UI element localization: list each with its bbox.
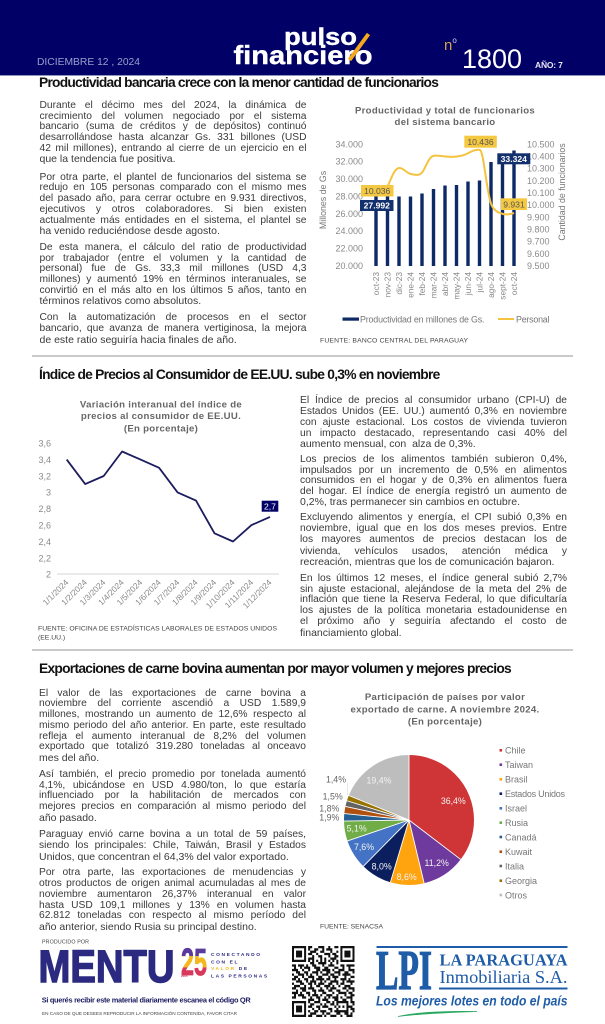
pie outer labels bbox=[319, 774, 346, 823]
source: FUENTE: BANCO CENTRAL DEL PARAGUAY bbox=[320, 338, 468, 344]
data labels: 33.324 bbox=[501, 154, 527, 164]
chart title: Productividad y total de funcionarios bbox=[355, 106, 535, 116]
heading: indice de precios: Índice de Precios al Consumidor de EE.UU. sube 0,3% en noviembre bbox=[39, 367, 440, 382]
legend: Otros bbox=[505, 890, 528, 900]
year: AÑO: 7 bbox=[535, 60, 563, 70]
text block: exportaciones bbox=[39, 688, 306, 933]
x axis month labels: sept-24 bbox=[498, 272, 508, 300]
left axis labels: 28.000 bbox=[335, 191, 363, 201]
logo: la paraguaya inmobiliaria: LPI bbox=[376, 940, 432, 1002]
chart title: Participación de países por valor bbox=[365, 692, 525, 703]
x axis month labels: mar-24 bbox=[428, 272, 438, 298]
legend: Rusia bbox=[505, 818, 528, 828]
paragraph 1: refleja el aumento interanual de 8,2% del volumen bbox=[39, 731, 306, 742]
legend bbox=[500, 746, 566, 900]
logo: la paraguaya inmobiliaria: Los mejores lotes en todo el país bbox=[376, 992, 568, 1008]
y axis labels: 2,8 bbox=[38, 504, 51, 514]
issue number symbol: no bbox=[444, 36, 457, 54]
heading: productividad: Productividad bancaria crece con la menor cantidad de funcionarios bbox=[39, 74, 438, 90]
x axis date labels: 1/10/2024 bbox=[204, 577, 237, 611]
logo: 25 years: 2005 bbox=[181, 974, 188, 978]
paragraph 3: los mayores aumentos de precios destacan los de bbox=[300, 534, 567, 545]
chart title: (En porcentaje) bbox=[124, 424, 198, 434]
axis titles: Millones de Gs bbox=[318, 170, 328, 229]
x axis month labels: oct-23 bbox=[371, 272, 381, 295]
right axis labels: 9.600 bbox=[527, 249, 550, 259]
axis titles bbox=[318, 143, 567, 241]
paragraph 3: términos relativos como absolutos. bbox=[40, 295, 201, 307]
chart: productividad y funcionarios bbox=[318, 106, 567, 344]
source: FUENTE: SENACSA bbox=[320, 924, 383, 930]
chart title bbox=[350, 692, 540, 727]
paragraph 3: noviembre, igual que en los dos meses previos. Entre bbox=[300, 523, 567, 534]
right axis labels: 9.900 bbox=[527, 212, 550, 222]
paragraph 3 bbox=[300, 512, 567, 568]
x axis month labels: may-24 bbox=[452, 272, 462, 300]
right axis labels: 9.800 bbox=[527, 224, 550, 234]
data label 2,7 bbox=[262, 501, 278, 512]
paragraph 2: consumidos en el hogar y de 0,3% en alimentos fuera bbox=[300, 475, 567, 486]
x axis date labels: 1/5/2024 bbox=[114, 577, 145, 607]
heading: exportaciones: Exportaciones de carne bovina aumentan por mayor volumen y mejores precios bbox=[39, 661, 511, 676]
legend: Israel bbox=[505, 804, 527, 814]
x axis month labels: ene-24 bbox=[406, 272, 416, 298]
paragraph 1: millones, mostrando un aumento de 12,6% respecto al bbox=[39, 709, 306, 720]
paragraph 1: noviembre del corriente ascendió a USD 1.589,9 bbox=[39, 698, 306, 709]
paragraph 2: influenciado por la habilitación de mercados con bbox=[39, 790, 306, 801]
x axis month labels: feb-24 bbox=[417, 272, 427, 296]
chart title bbox=[355, 106, 535, 128]
paragraph 4: Por otra parte, las exportaciones de menudencias y bbox=[39, 867, 306, 878]
data labels: 10.436 bbox=[467, 137, 494, 147]
qr instruction: Si querés recibir este material diariamente escanea el código QR bbox=[42, 996, 251, 1004]
legend bbox=[342, 314, 550, 324]
logo: pulso financiero bbox=[234, 24, 372, 70]
logo: 25 years bbox=[181, 942, 207, 984]
left axis labels: 30.000 bbox=[335, 174, 363, 184]
tagline: conectando bbox=[211, 952, 269, 979]
paragraph 2: Así también, el precio promedio por tonelada aumentó bbox=[39, 769, 306, 780]
source bbox=[38, 624, 277, 642]
paragraph 2: año pasado. bbox=[39, 812, 97, 824]
paragraph 3: Paraguay envió carne bovina a un total de 59 países, bbox=[39, 829, 306, 840]
pie inner labels: 19,4% bbox=[367, 775, 392, 785]
chart title: exportado de carne. A noviembre 2024. bbox=[350, 704, 540, 715]
left axis labels: 32.000 bbox=[335, 157, 363, 167]
x axis date labels: 1/1/2024 bbox=[41, 577, 71, 607]
legend: Italia bbox=[505, 861, 524, 871]
paragraph 3 bbox=[40, 242, 306, 307]
legend: Chile bbox=[505, 746, 526, 756]
paragraph 1 bbox=[39, 688, 306, 764]
x axis month labels: nov-23 bbox=[382, 272, 392, 297]
paragraph 2 bbox=[300, 454, 567, 508]
y axis labels: 3,6 bbox=[38, 438, 51, 448]
left axis labels: 20.000 bbox=[335, 261, 363, 271]
produced by: PRODUCIDO POR bbox=[42, 940, 89, 946]
paragraph 2: Por otra parte, el plantel de funcionarios del sistema se bbox=[40, 172, 306, 182]
text block: indice de precios bbox=[300, 394, 567, 639]
pie outer labels: 1,9% bbox=[319, 813, 339, 823]
paragraph 1: desarrollándose hasta alcanzar Gs. 331 billones (USD bbox=[40, 132, 306, 143]
left axis labels bbox=[335, 139, 363, 271]
x axis month labels: abr-24 bbox=[440, 272, 450, 296]
paragraph 3: por trabajador (entre el volumen y la cantidad de bbox=[40, 253, 306, 264]
x axis month labels: jun-24 bbox=[463, 272, 473, 296]
data labels bbox=[360, 136, 530, 211]
pie inner labels: 11,2% bbox=[425, 858, 449, 868]
paragraph 1: crecimiento del volumen negociado por el sistema bbox=[40, 111, 306, 122]
pie inner labels: 36,4% bbox=[441, 796, 466, 806]
paragraph 3: Excluyendo alimentos y energía, el CPI subió 0,3% en bbox=[300, 512, 567, 523]
source: (EE.UU.) bbox=[38, 634, 65, 642]
paragraph 3: convirtió en el más alto en los últimos 5 años, tanto en bbox=[40, 285, 306, 296]
right axis labels: 10.500 bbox=[527, 139, 555, 149]
data labels: 10.036 bbox=[364, 186, 391, 196]
paragraph 4: En los últimos 12 meses, el índice general subió 2,7% bbox=[300, 573, 567, 584]
paragraph 1: El valor de las exportaciones de carne bovina a bbox=[39, 688, 306, 698]
pie outer labels: 1,5% bbox=[323, 792, 343, 802]
paragraph 4: financiamiento global. bbox=[300, 627, 402, 639]
paragraph 2: 0,2%, tras permanecer sin cambios en octubre. bbox=[300, 496, 520, 508]
x axis date labels: 1/9/2024 bbox=[188, 577, 218, 607]
data labels: 27.992 bbox=[364, 201, 390, 211]
date: DICIEMBRE 12 , 2024 bbox=[37, 57, 140, 68]
logo: 25 years: 25 bbox=[181, 942, 207, 984]
axis titles: Cantidad de funcionarios bbox=[557, 143, 567, 241]
logo: pulso financiero: financiero bbox=[234, 40, 372, 70]
paragraph 4: sin ajuste estacional, alejándose de la meta del 2% de bbox=[300, 584, 567, 595]
x axis date labels: 1/6/2024 bbox=[133, 577, 163, 607]
y axis labels: 2,4 bbox=[38, 537, 51, 547]
paragraph 1: Estados Unidos (EE. UU.) aumentó 0,3% en noviembre bbox=[300, 406, 567, 416]
y axis labels: 3 bbox=[46, 488, 51, 498]
issue number: 1800 bbox=[462, 44, 522, 74]
paragraph 2 bbox=[40, 172, 306, 237]
paragraph 2 bbox=[39, 769, 306, 824]
bars: productividad bbox=[374, 150, 516, 266]
right axis labels: 10.000 bbox=[527, 200, 555, 210]
line: personal bbox=[376, 150, 514, 214]
x axis date labels bbox=[41, 577, 274, 611]
legend: Taiwan bbox=[505, 760, 533, 770]
pie outer labels: 1,4% bbox=[326, 774, 346, 784]
y axis labels: 3,2 bbox=[38, 471, 51, 481]
paragraph 3: vivienda, vehículos usados, atención médica y bbox=[300, 546, 567, 557]
paragraph 1: El Índice de precios al consumidor urbano (CPI-U) de bbox=[300, 394, 567, 406]
pie inner labels: 5,1% bbox=[347, 824, 367, 834]
right axis labels: 9.700 bbox=[527, 237, 550, 247]
paragraph 2: impulsados por un incremento de 0,5% en alimentos bbox=[300, 465, 567, 476]
right axis labels: 9.500 bbox=[527, 261, 550, 271]
logo: la paraguaya inmobiliaria: Inmobiliaria S.A. bbox=[440, 967, 568, 987]
legend: Personal bbox=[516, 314, 550, 324]
logo: pulso financiero: pulso bbox=[284, 24, 357, 51]
tagline: conectando: VALOR DE bbox=[211, 966, 249, 972]
paragraph 4: noviembre aumentaron 26,37% interanual en valor bbox=[39, 889, 306, 900]
text block: productividad bbox=[40, 100, 306, 346]
chart title: precios al consumidor de EE.UU. bbox=[81, 411, 241, 422]
paragraph 1: mismo periodo del año anterior. En parte, este resultado bbox=[39, 720, 306, 731]
tagline: conectando: LAS PERSONAS bbox=[211, 973, 269, 979]
logo: la paraguaya inmobiliaria: LA PARAGUAYA bbox=[440, 950, 568, 970]
logo: mentu: MENTU bbox=[38, 941, 174, 992]
x axis month labels: oct-24 bbox=[509, 272, 519, 295]
tagline: conectando: CON EL bbox=[211, 960, 239, 966]
left axis labels: 34.000 bbox=[335, 139, 363, 149]
source: FUENTE: OFICINA DE ESTADÍSTICAS LABORALES DE ESTADOS UNIDOS bbox=[38, 624, 277, 632]
x axis month labels: jul-24 bbox=[474, 272, 484, 293]
pie inner labels: 7,6% bbox=[354, 842, 374, 852]
paragraph 4: bancario, que avanza de manera vertiginosa, la mejora bbox=[40, 323, 306, 334]
paragraph 3: millones) y aumentó 19% en términos interanuales, se bbox=[40, 274, 306, 285]
paragraph 1: Durante el décimo mes del 2024, la dinámica de bbox=[40, 100, 306, 111]
footer: producer block bbox=[38, 940, 269, 1016]
tagline: conectando: CONECTANDO bbox=[211, 952, 262, 958]
left axis labels: 24.000 bbox=[335, 226, 363, 236]
legend: Kuwait bbox=[505, 847, 533, 857]
paragraph 4: los ajustes de la política monetaria estadounidense en bbox=[300, 605, 567, 616]
left axis labels: 22.000 bbox=[335, 244, 363, 254]
paragraph 3: Unidos, que concentran el 64,3% del valor exportado. bbox=[39, 851, 289, 863]
right axis labels: 10.100 bbox=[527, 188, 555, 198]
data labels: 9.931 bbox=[503, 199, 525, 209]
right axis labels: 10.300 bbox=[527, 164, 555, 174]
pie inner labels: 8,6% bbox=[397, 872, 417, 882]
paragraph 1 bbox=[40, 100, 306, 165]
paragraph 1: exportado que totalizó 319.280 toneladas al onceavo bbox=[39, 741, 306, 752]
qr code bbox=[292, 946, 354, 1017]
paragraph 4: el próximo año y seguiría afectando el costo de bbox=[300, 616, 567, 627]
legend: Estados Unidos bbox=[505, 789, 566, 799]
chart title: Variación interanual del índice de bbox=[80, 400, 242, 410]
paragraph 2: Los precios de los alimentos también subieron 0,4%, bbox=[300, 454, 567, 465]
logo: la paraguaya inmobiliaria bbox=[376, 940, 568, 1017]
paragraph 3: recreación, mientras que los de comunicación bajaron. bbox=[300, 556, 554, 568]
x axis month labels bbox=[371, 272, 519, 300]
paragraph 1: mes del año. bbox=[39, 752, 99, 764]
paragraph 3 bbox=[39, 829, 306, 863]
paragraph 1: un impacto destacado, representando casi 40% del bbox=[300, 428, 567, 438]
y axis labels: 3,4 bbox=[38, 455, 51, 465]
paragraph 1: bancario (suma de créditos y de depósitos) continuó bbox=[40, 121, 306, 132]
left axis labels: 26.000 bbox=[335, 209, 363, 219]
chart: participacion de paises bbox=[319, 692, 566, 930]
pie inner labels: 8,0% bbox=[372, 861, 392, 871]
pie inner labels bbox=[347, 775, 466, 882]
x axis date labels: 1/12/2024 bbox=[240, 577, 274, 611]
paragraph 1: 42 mil millones), entrando al cierre de un ejercicio en el bbox=[40, 143, 306, 154]
paragraph 2: del pasado año, para cerrar octubre en 9.931 directivos, bbox=[40, 193, 306, 204]
line: inflation bbox=[67, 452, 270, 542]
paragraph 3: siendo los principales: Chile, Taiwán, Brasil y Estados bbox=[39, 840, 306, 851]
paragraph 4: 62.812 toneladas con respecto al mismo período del bbox=[39, 910, 306, 921]
paragraph 2: del hogar. El índice de energía registró un aumento de bbox=[300, 486, 567, 497]
paragraph 2: 4,1%, ubicándose en USD 4.980/ton, lo que estaría bbox=[39, 780, 306, 791]
legend: Productividad en millones de Gs. bbox=[360, 314, 484, 324]
right axis labels: 10.200 bbox=[527, 176, 555, 186]
y axis labels bbox=[38, 438, 51, 580]
paragraph 4: inflación que tiene la Reserva Federal, lo que dificultaría bbox=[300, 594, 567, 605]
x axis month labels: ago-24 bbox=[486, 272, 496, 298]
pie slices bbox=[376, 788, 442, 852]
x axis date labels: 1/11/2024 bbox=[222, 577, 255, 610]
right axis labels bbox=[527, 139, 555, 271]
paragraph 4 bbox=[300, 573, 567, 639]
paragraph 2: redujo en 105 personas comparado con el mismo mes bbox=[40, 182, 306, 193]
paragraph 1: con ajuste estacional. Los costos de vivienda tuvieron bbox=[300, 416, 567, 428]
chart: variacion interanual bbox=[38, 400, 279, 642]
y axis labels: 2 bbox=[46, 570, 51, 580]
x axis date labels: 1/2/2024 bbox=[59, 577, 89, 607]
legend: Brasil bbox=[505, 774, 528, 784]
citation note: EN CASO DE QUE DESEES REPRODUCIR LA INFORMACIÓN CONTENIDA, FAVOR CITAR bbox=[42, 1010, 238, 1016]
paragraph 3: personal) fue de Gs. 33,3 mil millones (USD 4,3 bbox=[40, 263, 306, 274]
header band bbox=[0, 0, 605, 76]
paragraph 1: que la tendencia fue positiva. bbox=[40, 153, 176, 165]
x axis date labels: 1/3/2024 bbox=[78, 577, 108, 607]
paragraph 4 bbox=[39, 867, 306, 933]
pie outer labels: 1,8% bbox=[319, 803, 339, 813]
data label 2,7: 2,7 bbox=[264, 501, 276, 511]
paragraph 4: de este ratio seguiría hacia finales de año. bbox=[40, 334, 237, 346]
paragraph 2: ejecutivos y otros colaboradores. Si bien existen bbox=[40, 204, 306, 215]
chart title bbox=[80, 400, 242, 434]
chart title: del sistema bancario bbox=[395, 117, 495, 128]
paragraph 3: De esta manera, el cálculo del ratio de productividad bbox=[40, 242, 306, 253]
legend: Georgia bbox=[505, 876, 537, 886]
paragraph 4: otros productos de origen animal acumuladas al mes de bbox=[39, 878, 306, 889]
y axis labels: 2,2 bbox=[38, 553, 51, 563]
x axis date labels: 1/8/2024 bbox=[170, 577, 200, 607]
y axis labels: 2,6 bbox=[38, 520, 51, 530]
legend: Canadá bbox=[505, 832, 537, 842]
paragraph 2: actualmente más entidades en el sistema, el plantel se bbox=[40, 215, 306, 226]
paragraph 1: aumento mensual, con alza de 0,3%. bbox=[300, 438, 476, 450]
right axis labels: 10.400 bbox=[527, 152, 555, 162]
paragraph 4: hasta USD 109,1 millones y 13% en volumen hasta bbox=[39, 900, 306, 911]
paragraph 2: mejores precios en comparación al mismo periodo del bbox=[39, 801, 306, 812]
paragraph 1 bbox=[300, 394, 567, 450]
chart title: (En porcentaje) bbox=[408, 716, 482, 727]
paragraph 4: año anterior, siendo Rusia su principal destino. bbox=[39, 921, 257, 933]
paragraph 2: ha venido reduciéndose desde agosto. bbox=[40, 225, 220, 237]
x axis date labels: 1/7/2024 bbox=[151, 577, 182, 607]
paragraph 4 bbox=[40, 312, 306, 346]
paragraph 4: Con la automatización de procesos en el sector bbox=[40, 312, 306, 323]
x axis month labels: dic-23 bbox=[394, 272, 404, 295]
x axis date labels: 1/4/2024 bbox=[96, 577, 126, 607]
